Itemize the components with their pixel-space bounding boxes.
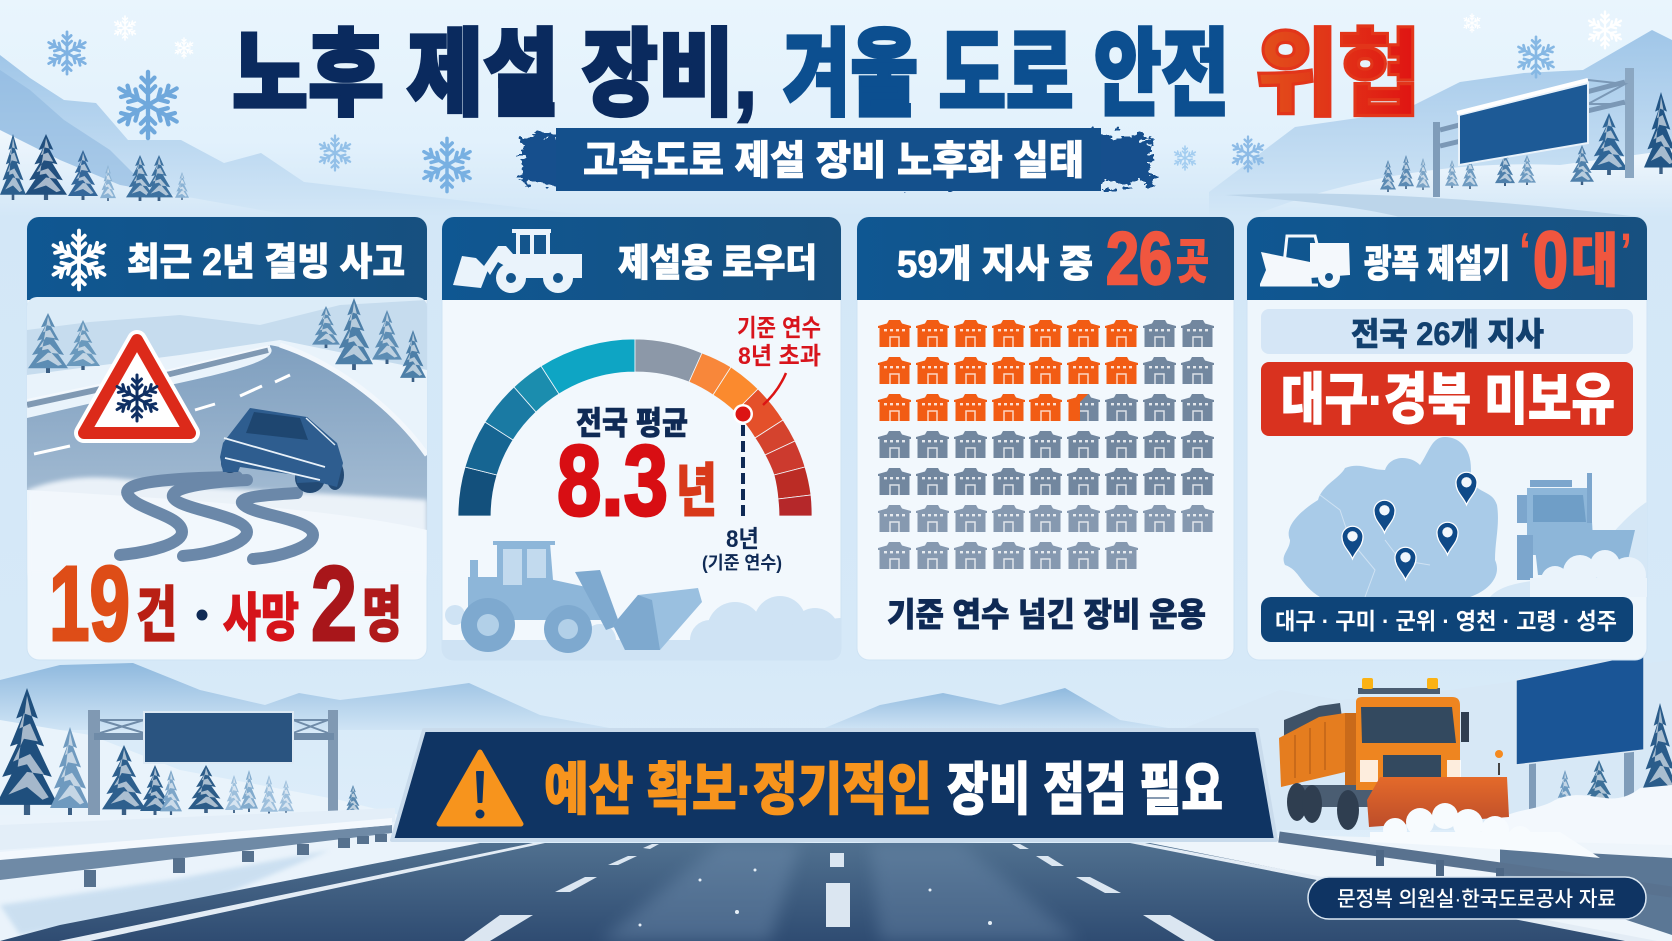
header: snow loader [442,217,841,300]
stat: national average 8.3: 전국 평균 [576,405,688,441]
faded loader illustration [442,541,862,662]
road accident scene [27,297,427,575]
source credit: 문정복 의원실·한국도로공사 자료 [1337,888,1616,911]
title [232,22,1421,128]
stat: 19 cases, 2 deaths: 건 [136,582,177,649]
header: wide snowplow [1247,215,1647,304]
threshold marker [733,373,786,520]
decorative snowflakes [46,12,1623,192]
stat: 19 cases, 2 deaths: 2 [311,545,357,663]
header: snow loader: 제설용 로우더 [618,243,817,285]
left guardrails [0,808,395,887]
lower-right sign [1516,653,1644,810]
header: 26 branches: 26 [1106,217,1172,300]
right side roadway behind guardrail [1145,835,1672,941]
bottom call-to-action banner: 예산 확보·정기적인 [544,758,932,822]
stat: 19 cases, 2 deaths [49,545,402,663]
source credit [1308,877,1646,919]
skid marks [120,477,313,559]
panel: snow loader gauge [442,217,862,662]
header: icy accidents [27,217,427,300]
half orange building [1067,394,1088,421]
title: 위협 [1255,22,1421,128]
bottom-right trees and snow [1490,703,1672,860]
header: wide snowplow: 광폭 제설기 [1364,244,1510,286]
warning triangle icon [439,752,521,824]
left snow bank [0,815,480,941]
header: 26 branches: 곳 [1176,236,1209,289]
label: 8-year standard: (기준 연수) [702,553,782,573]
top-right mountains and road [1209,30,1672,217]
callout: over 8 years: 기준 연수 [737,315,821,342]
map of Daegu and Gyeongbuk [1284,437,1650,597]
bottom-left trees [0,688,361,815]
highlighted zero units: 0 [1533,215,1568,304]
callout: over 8 years [737,315,821,370]
gauge chart [458,339,812,516]
header: icy accidents: 최근 2년 결빙 사고 [127,242,405,284]
subtitle ribbon [522,128,1152,191]
header: 26 branches [857,217,1234,300]
panel: wide snowplow zero [1247,215,1650,660]
icon: white plow truck [1260,236,1350,288]
header: 26 branches: 59개 지사 중 [897,244,1093,286]
stat: national average 8.3: 8.3 [557,425,668,537]
label: 8-year standard: 8년 [726,526,759,553]
pill: 26 branches nationwide: 전국 26개 지사 [1351,316,1544,352]
faded plow truck [1490,473,1650,597]
highlighted zero units: ’ [1620,223,1632,279]
bottom call-to-action banner [392,730,1276,840]
map pins [1342,472,1477,580]
pill: list of regions [1261,597,1633,642]
stat: 19 cases, 2 deaths: 명 [362,582,402,649]
stat: 19 cases, 2 deaths: 19 [49,545,130,663]
highlighted zero units: 대 [1571,229,1618,294]
stat: 19 cases, 2 deaths: 사망 [223,590,299,648]
highlighted zero units: ‘ [1519,223,1531,279]
pill: 26 branches nationwide [1261,309,1633,354]
pictogram of branch buildings [878,320,1214,569]
red box: Daegu and Gyeongbuk none: 대구·경북 미보유 [1281,368,1615,431]
pill: list of regions: 대구 · 구미 · 군위 · 영천 · 고령 · 성주 [1275,608,1617,634]
label: 8-year standard [702,526,782,573]
top-right highway gantry sign [1433,68,1634,197]
caption: equipment past service life: 기준 연수 넘긴 장비 운용 [887,596,1206,633]
top-left mountains [0,55,600,217]
icon: ice warning triangle [84,340,190,433]
callout: over 8 years: 8년 초과 [738,343,821,370]
title: 겨울 도로 안전 [783,22,1229,128]
bottom-left gantry sign [88,710,338,815]
highway road surface [0,843,1657,941]
icon: white loader [453,229,582,293]
bottom call-to-action banner: 장비 점검 필요 [947,758,1223,822]
panel: icy accidents [27,217,427,663]
stat: national average 8.3: 년 [676,459,717,524]
title: 노후 제설 장비, [232,22,757,128]
orange snowplow truck [1279,678,1600,858]
highlighted zero units [1519,215,1632,304]
right guardrail [1279,837,1672,905]
bottom mountains [0,660,1672,830]
icon: sliding car [220,408,344,493]
subtitle ribbon: 고속도로 제설 장비 노후화 실태 [583,139,1084,183]
panel: 26 of 59 branches [857,217,1234,660]
